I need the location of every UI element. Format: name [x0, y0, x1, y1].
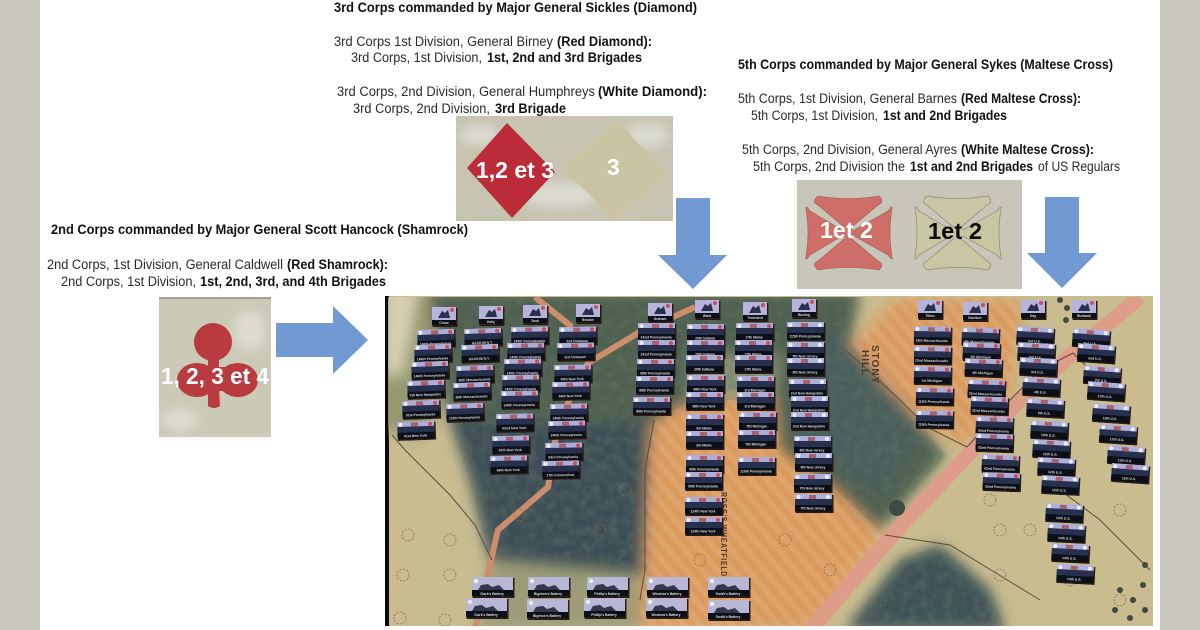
icon: white diamond — [562, 122, 667, 220]
counters: 3rd Corps regiments column 6: 3rd Maine — [696, 444, 712, 448]
counters: 3rd Corps leaders: Trobriand — [747, 316, 763, 320]
counters: 5th Corps regiments column 12: 17th U.S. — [1098, 394, 1112, 399]
counters: 3rd Corps leaders: Graham — [654, 317, 666, 321]
label: 3: 3 — [607, 154, 620, 180]
counters: 3rd Corps regiments column 8: 7th New Jersey — [801, 506, 825, 510]
counters: 3rd Corps regiments column 6: 3rd Maine — [696, 426, 712, 430]
counters: 3rd Corps regiments column 5: 68th Pennsylvania — [639, 388, 669, 392]
counters: 5th Corps regiments column 9: 18th Massachusetts — [916, 339, 948, 343]
counters: 3rd Corps regiments column 8: 115th Pennsylvania — [789, 334, 821, 338]
counters: artillery batteries: Clark's Battery — [474, 613, 498, 617]
counters: 3rd Corps regiments column 5: 141st Pennsylvania — [640, 336, 672, 340]
counters: 5th Corps regiments column 11: 14th U.S. — [1067, 577, 1082, 582]
counters: 5th Corps regiments column 10: 62nd Pennsylvania — [984, 467, 1015, 472]
counters: 5th Corps regiments column 10 — [961, 327, 1021, 492]
counters: 5th Corps regiments column 12: 11th U.S. — [1118, 458, 1132, 463]
counters: artillery batteries: Winslow's Battery — [651, 613, 681, 617]
counters: 3rd Corps regiments column 6: 86th New York — [692, 404, 716, 408]
counters: 3rd Corps regiments column 8: 2nd New Hampshire — [791, 392, 823, 396]
line: 3rd Corps 1st Division brigades: 1st, 2nd and 3rd Brigades — [487, 50, 642, 65]
heading: 2nd Corps: 2nd Corps commanded by Major General Scott Hancock (Shamrock) — [51, 222, 468, 237]
counters: artillery batteries: Winslow's Battery — [652, 592, 682, 596]
arrow: down to 5th Corps counters — [1027, 197, 1097, 288]
heading: 5th Corps: 5th Corps commanded by Major General Sykes (Maltese Cross) — [738, 57, 1113, 72]
label: 1et 2 white: 1et 2 — [820, 217, 873, 243]
road: diagonal Wheatfield road — [810, 297, 1140, 630]
line: 2nd Corps 1st Division brigades: 2nd Corps, 1st Division, — [61, 274, 196, 289]
counters: 2nd Corps regiments column 3: 140th Pennsylvania — [513, 339, 545, 343]
counters: 2nd Corps regiments column 4: 2nd Delaware — [564, 355, 586, 359]
counters: 3rd Corps regiments column 7: 3rd Michigan — [745, 388, 765, 392]
counters: 5th Corps leaders: Tilton — [925, 314, 935, 318]
counters: 3rd Corps regiments column 6: 20th Indiana — [695, 352, 715, 356]
line: 3rd Corps 1st Division brigades — [351, 50, 642, 65]
counters: 3rd Corps regiments column 8: 6th New Jersey — [800, 448, 824, 452]
counters: 2nd Corps regiments column 4: 145th Pennsylvania — [552, 416, 584, 420]
line: 5th Corps 1st Division commander — [738, 91, 1081, 106]
counters: 3rd Corps regiments column 7: 110th Pennsylvania — [740, 470, 772, 474]
line: 5th Corps 1st Division commander: (Red Maltese Cross): — [961, 91, 1081, 106]
line: 5th Corps 1st Division commander: 5th Corps, 1st Division, General Barnes — [738, 91, 957, 106]
counters: 3rd Corps regiments column 7: 5th Michigan — [747, 424, 767, 428]
line: 3rd Corps 1st Division commander: 3rd Corps 1st Division, General Birney — [334, 34, 553, 49]
counters: 2nd Corps regiments column 1: 148th Pennsylvania — [414, 373, 445, 378]
counters: 3rd Corps regiments column 6: 99th Pennsylvania — [689, 468, 719, 472]
counters: 5th Corps regiments column 10: 9th Massachusetts — [964, 340, 995, 345]
text block: 5th Corps — [738, 57, 1120, 174]
counters: 2nd Corps regiments column 3: 140th Pennsylvania — [509, 355, 541, 359]
counters: artillery batteries: Clark's Battery — [480, 592, 504, 596]
image panel: 3rd Corps diamond badges — [456, 116, 673, 221]
line: 2nd Corps 1st Division brigades: 1st, 2nd, 3rd, and 4th Brigades — [200, 274, 386, 289]
counters: 2nd Corps leaders: Zook — [531, 319, 539, 323]
counters: 3rd Corps regiments column 7: 17th Maine — [744, 368, 762, 372]
line: 5th Corps 2nd Division brigades — [753, 159, 1120, 174]
counters: 5th Corps leaders — [918, 300, 1098, 322]
counters: 5th Corps regiments column 10: 32nd Massachusetts — [972, 409, 1005, 414]
counters: 5th Corps leaders: Burbank — [1077, 314, 1091, 318]
counters: artillery batteries: Smith's Battery — [716, 615, 740, 619]
counters: 5th Corps regiments column 12: 17th U.S. — [1110, 437, 1124, 442]
counters: 2nd Corps regiments column 2: 63-69-88 N.Y. — [472, 340, 493, 345]
counters: 5th Corps regiments column 10: 4th Michigan — [970, 355, 991, 359]
label: 1et 2 black: 1et 2 — [928, 218, 982, 244]
map label: Rose's Wheatfield: ROSE'S WHEATFIELD — [719, 492, 729, 577]
road: winding through the woods — [475, 307, 695, 630]
counters: 3rd Corps regiments column 7: 3rd Michigan — [745, 404, 765, 408]
label: 1, 2, 3 et 4: 1, 2, 3 et 4 — [161, 363, 269, 389]
counters: 5th Corps regiments column 12 — [1072, 328, 1150, 485]
arrow: right to 2nd Corps counters — [276, 306, 368, 374]
counters: 5th Corps regiments column 9 — [914, 326, 954, 430]
counters: 2nd Corps regiments column 2 — [446, 328, 503, 423]
line: 3rd Corps 2nd Division commander: 3rd Corps, 2nd Division, General Humphreys — [337, 84, 595, 99]
counters: 2nd Corps regiments column 1 — [397, 329, 456, 441]
map photograph with counters — [380, 290, 1153, 630]
counters: 5th Corps regiments column 10: 62nd Pennsylvania — [978, 446, 1009, 451]
counters: 3rd Corps regiments column 6: 20th Indiana — [694, 368, 714, 372]
counters: 3rd Corps leaders — [648, 299, 818, 323]
line: 5th Corps 2nd Division commander: (White Maltese Cross): — [961, 142, 1094, 157]
counters: 5th Corps regiments column 12: 2nd U.S. — [1088, 356, 1102, 361]
heading: 3rd Corps: 3rd Corps commanded by Major General Sickles (Diamond) — [334, 0, 697, 15]
forest texture — [432, 297, 1001, 626]
counters: 5th Corps regiments column 11 — [1016, 326, 1095, 585]
line: 5th Corps 2nd Division brigades: of US Regulars — [1038, 159, 1120, 174]
counters: 5th Corps regiments column 11: 10th U.S. — [1041, 433, 1056, 438]
counters: 3rd Corps regiments column 7: 5th Michigan — [746, 442, 766, 446]
line: 3rd Corps 2nd Division brigade: 3rd Brigade — [495, 101, 566, 116]
line: 3rd Corps 1st Division commander: (Red Diamond): — [557, 34, 652, 49]
line: 2nd Corps 1st Division commander: 2nd Corps, 1st Division, General Caldwell — [47, 257, 283, 272]
counters: 2nd Corps regiments column 1: 81st Pennsylvania — [406, 412, 435, 417]
line: 5th Corps 1st Division brigades: 1st and 2nd Brigades — [883, 108, 1007, 123]
counters: 2nd Corps regiments column 4: 53rd Pennsylvania — [548, 455, 578, 459]
counters: 5th Corps regiments column 12: 2nd U.S. — [1083, 341, 1097, 346]
line: 5th Corps 2nd Division brigades: 1st and 2nd Brigades — [910, 159, 1033, 174]
counters: 5th Corps regiments column 10: 4th Michigan — [972, 371, 993, 375]
line: 5th Corps 2nd Division commander: 5th Corps, 2nd Division, General Ayres — [742, 142, 957, 157]
counters: 5th Corps regiments column 11: 14th U.S. — [1056, 516, 1071, 521]
counters: 5th Corps regiments column 10: 62nd Pennsylvania — [985, 485, 1016, 490]
line: 5th Corps 1st Division brigades: 5th Corps, 1st Division, — [751, 108, 878, 123]
counters: 2nd Corps regiments column 2: 63-69-88 N.Y. — [469, 356, 490, 361]
counters: 5th Corps regiments column 11: 14th U.S. — [1058, 536, 1073, 541]
counters: artillery batteries — [466, 577, 750, 621]
counters: 3rd Corps regiments column 7: 17th Maine — [745, 336, 763, 340]
counters: 5th Corps regiments column 12: 7th U.S. — [1095, 378, 1107, 383]
counters: 3rd Corps regiments column 7: 17th Maine — [744, 352, 762, 356]
line: 2nd Corps 1st Division commander: (Red Shamrock): — [287, 257, 388, 272]
counters: 2nd Corps regiments column 3: 140th Pennsylvania — [504, 387, 536, 391]
counters: 3rd Corps regiments column 6: 124th New York — [691, 510, 716, 514]
counters: 2nd Corps regiments column 2: 116th Pennsylvania — [449, 415, 480, 420]
counters: artillery batteries: Bigelow's Battery — [533, 614, 561, 618]
counters: 3rd Corps regiments column 8: 7th New Jersey — [800, 486, 824, 490]
line: 3rd Corps 2nd Division commander: (White Diamond): — [598, 84, 707, 99]
counters: 2nd Corps regiments column 4: 2nd Delaware — [566, 339, 588, 343]
counters: 3rd Corps regiments column 8: 6th New Jersey — [801, 466, 825, 470]
counters: 3rd Corps regiments column 8: 2nd New Hampshire — [793, 424, 825, 428]
counters: 2nd Corps regiments column 4: 27th Connecticut — [546, 473, 575, 477]
arrow: down to 3rd Corps counters — [658, 198, 727, 289]
counters: 5th Corps regiments column 9: 22nd Massachusetts — [915, 359, 948, 363]
counters: 3rd Corps regiments column 8: 8th New Jersey — [793, 370, 817, 374]
icon: red Maltese cross — [806, 196, 892, 270]
counters: 2nd Corps regiments column 4 — [542, 326, 598, 480]
counters: 3rd Corps regiments column 6 — [685, 324, 726, 536]
counters: 5th Corps regiments column 11: 4th U.S. — [1034, 390, 1047, 395]
counters: 2nd Corps regiments column 3 — [490, 326, 550, 475]
icon: red diamond — [467, 123, 555, 218]
counters: 5th Corps regiments column 9: 1st Michigan — [921, 379, 942, 383]
line: 5th Corps 1st Division brigades — [751, 108, 1007, 123]
label: 1,2 et 3: 1,2 et 3 — [476, 157, 554, 183]
counters: 5th Corps regiments column 10: 32nd Massachusetts — [969, 392, 1002, 397]
counters: 5th Corps regiments column 11: 3rd U.S. — [1031, 370, 1044, 375]
counters: 3rd Corps regiments column 6: 124th New York — [691, 530, 716, 534]
counters: 3rd Corps regiments column 5: 68th Pennsylvania — [636, 410, 666, 414]
counters: 2nd Corps leaders — [432, 304, 602, 327]
counters: 5th Corps regiments column 11: 3rd U.S. — [1029, 355, 1042, 360]
counters: 2nd Corps regiments column 3: 66th New York — [497, 468, 520, 472]
counters: 5th Corps regiments column 11: 6th U.S. — [1038, 411, 1051, 416]
counters: artillery batteries: Phillip's Battery — [591, 613, 617, 617]
map label: Stony Hill: STONY — [869, 345, 880, 384]
counters: 5th Corps regiments column 11: 12th U.S. — [1052, 488, 1067, 493]
counters: 2nd Corps regiments column 4: 145th Pennsylvania — [550, 433, 582, 437]
counters: 2nd Corps regiments column 3: 52nd New York — [502, 426, 526, 430]
counters: 3rd Corps leaders: Ward — [703, 314, 711, 318]
counters: 2nd Corps regiments column 2: 28th Massachusetts — [455, 394, 488, 399]
counters: 3rd Corps regiments column 8: 2nd New Hampshire — [793, 408, 825, 412]
counters: 2nd Corps leaders: Brooke — [582, 318, 594, 322]
map terrain — [380, 290, 1153, 630]
counters: 3rd Corps regiments column 6: 99th Pennsylvania — [688, 484, 718, 488]
counters: 3rd Corps regiments column 8 — [787, 322, 834, 513]
image panel: 2nd Corps shamrock badge — [159, 297, 271, 437]
map label: Hill: HILL — [859, 350, 870, 376]
text block: 2nd Corps — [47, 222, 468, 289]
counters: 3rd Corps regiments column 8: 5th New Jersey — [793, 354, 817, 358]
line: 5th Corps 2nd Division brigades: 5th Corps, 2nd Division the — [753, 159, 905, 174]
counters: 2nd Corps leaders: Kelly — [487, 320, 495, 324]
counters: 3rd Corps regiments column 6: 20th Indiana — [695, 336, 715, 340]
line: 5th Corps 2nd Division commander — [742, 142, 1094, 157]
counters: 3rd Corps regiments column 5: 141st Pennsylvania — [640, 352, 672, 356]
field stripes — [640, 297, 1023, 626]
counters: 5th Corps regiments column 10: 62nd Pennsylvania — [978, 429, 1009, 434]
counters: 5th Corps regiments column 11: 14th U.S. — [1062, 556, 1077, 561]
counters: artillery batteries: Phillip's Battery — [594, 592, 620, 596]
counters: 2nd Corps regiments column 4: 64th New York — [559, 394, 582, 398]
icon: red shamrock — [177, 323, 258, 408]
counters: 2nd Corps regiments column 3: 140th Pennsylvania — [506, 371, 538, 375]
counters: 5th Corps regiments column 9: 118th Pennsylvania — [918, 423, 950, 427]
counters: 5th Corps regiments column 11: 12th U.S. — [1048, 470, 1063, 475]
counters: 5th Corps regiments column 11: 12th U.S. — [1043, 452, 1058, 457]
counters: 3rd Corps regiments column 5 — [633, 323, 676, 416]
line: 3rd Corps 2nd Division brigade — [353, 101, 566, 116]
counters: 3rd Corps regiments column 6: 86th New York — [693, 388, 717, 392]
counters: 2nd Corps regiments column 3: 57th New York — [499, 448, 522, 452]
counters: artillery batteries: Smith's Battery — [716, 592, 740, 596]
counters: 3rd Corps regiments column 5: 68th Pennsylvania — [640, 372, 670, 376]
counters: 2nd Corps leaders: Cross — [439, 321, 449, 325]
counters: 5th Corps regiments column 11: 3rd U.S. — [1028, 339, 1041, 344]
counters: 2nd Corps regiments column 2: 28th Massachusetts — [458, 377, 491, 382]
image panel: 5th Corps Maltese cross badges — [797, 180, 1022, 289]
counters: 5th Corps regiments column 12: 11th U.S. — [1122, 476, 1136, 481]
counters: 2nd Corps regiments column 4: 64th New York — [561, 377, 584, 381]
counters: 2nd Corps regiments column 3: 140th Pennsylvania — [503, 403, 535, 407]
line: 3rd Corps 1st Division brigades: 3rd Corps, 1st Division, — [351, 50, 482, 65]
icon: white Maltese cross — [915, 196, 1001, 270]
counters: 5th Corps regiments column 12: 10th U.S. — [1103, 416, 1117, 421]
line: 3rd Corps 2nd Division brigade: 3rd Corps, 2nd Division, — [353, 101, 490, 116]
counters: 5th Corps leaders: Day — [1030, 314, 1036, 318]
counters: 3rd Corps leaders: Burling — [798, 313, 810, 317]
counters: 5th Corps leaders: Sweitzer — [968, 316, 983, 320]
text block: 3rd Corps — [334, 0, 707, 116]
counters: 2nd Corps regiments column 1: 148th Pennsylvania — [417, 356, 448, 361]
line: 2nd Corps 1st Division brigades — [61, 274, 386, 289]
counters: 2nd Corps regiments column 1: 148th Pennsylvania — [420, 341, 451, 346]
counters: 5th Corps regiments column 9: 118th Pennsylvania — [918, 400, 950, 404]
counters: artillery batteries: Bigelow's Battery — [534, 592, 562, 596]
road: north branch — [535, 297, 572, 327]
counters: 2nd Corps regiments column 1: 61st New York — [404, 433, 427, 438]
counters: 2nd Corps regiments column 1: 5th New Hampshire — [410, 392, 441, 397]
counters: 3rd Corps regiments column 7 — [735, 323, 778, 476]
